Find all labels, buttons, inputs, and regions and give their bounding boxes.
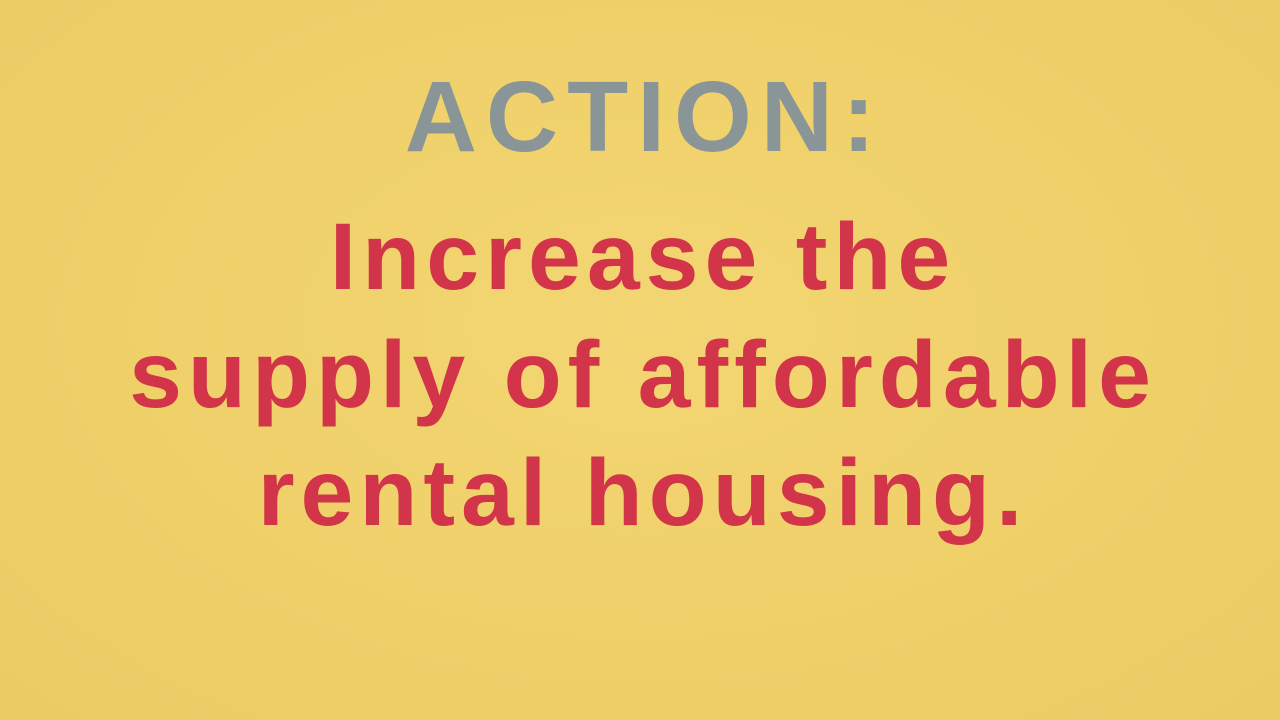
text block: action statement: supply of affordable [129,322,1157,428]
text block: action statement [129,204,1157,546]
text block: action statement: rental housing. [258,440,1028,546]
title: ACTION: [405,61,884,173]
text block: action statement: Increase the [330,204,956,310]
